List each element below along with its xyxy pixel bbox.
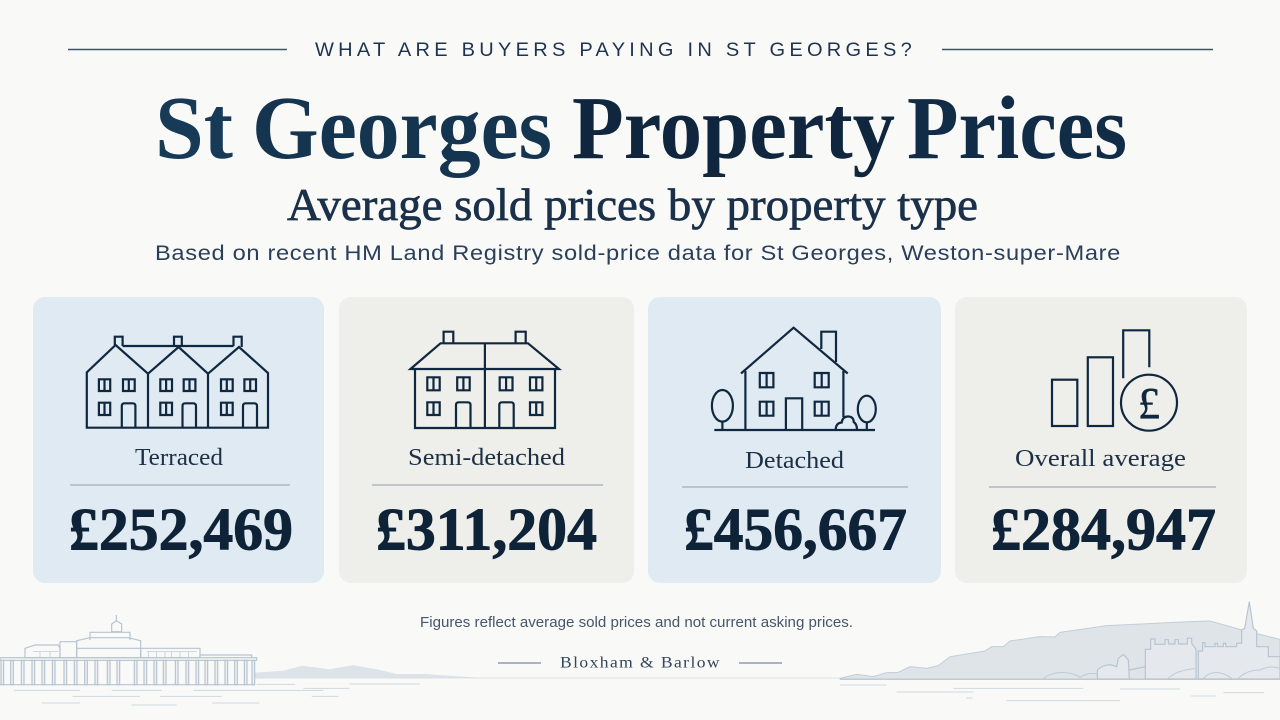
eyebrow heading: WHAT ARE BUYERS PAYING IN ST GEORGES? [315, 40, 916, 61]
title: St [155, 79, 233, 178]
footnote: Figures reflect average sold prices and not current asking prices. [420, 615, 853, 631]
title: Prices [907, 79, 1127, 178]
price: semi-detached: £311,204 [376, 496, 597, 562]
icon: terraced houses [87, 337, 268, 428]
icon: detached house [712, 328, 876, 430]
panel: terraced [33, 297, 324, 583]
price: detached: £456,667 [684, 496, 907, 562]
brand name: Bloxham & Barlow [560, 654, 721, 672]
label: terraced: Terraced [135, 445, 223, 471]
data source note: Based on recent HM Land Registry sold-price data for St Georges, Weston-super-Mare [155, 241, 1121, 265]
subtitle: Average sold prices by property type [287, 179, 978, 230]
panel: semi-detached [339, 297, 634, 583]
panel: overall average [955, 297, 1247, 583]
label: detached: Detached [745, 448, 844, 474]
price: terraced: £252,469 [69, 496, 293, 562]
icon: bar chart with pound coin [1052, 330, 1177, 431]
title [155, 79, 1127, 178]
label: overall average: Overall average [1015, 446, 1186, 472]
panel: detached [648, 297, 941, 583]
illustration: headland and town [840, 602, 1280, 701]
icon: bar chart with pound coin: £ [1138, 379, 1160, 428]
illustration: pier [0, 615, 843, 705]
illustration: distant hills [255, 665, 480, 678]
label: semi-detached: Semi-detached [408, 445, 565, 471]
icon: semi-detached house [410, 332, 559, 428]
price: overall average: £284,947 [991, 496, 1216, 562]
title: Property [572, 79, 895, 178]
title: Georges [252, 79, 552, 178]
